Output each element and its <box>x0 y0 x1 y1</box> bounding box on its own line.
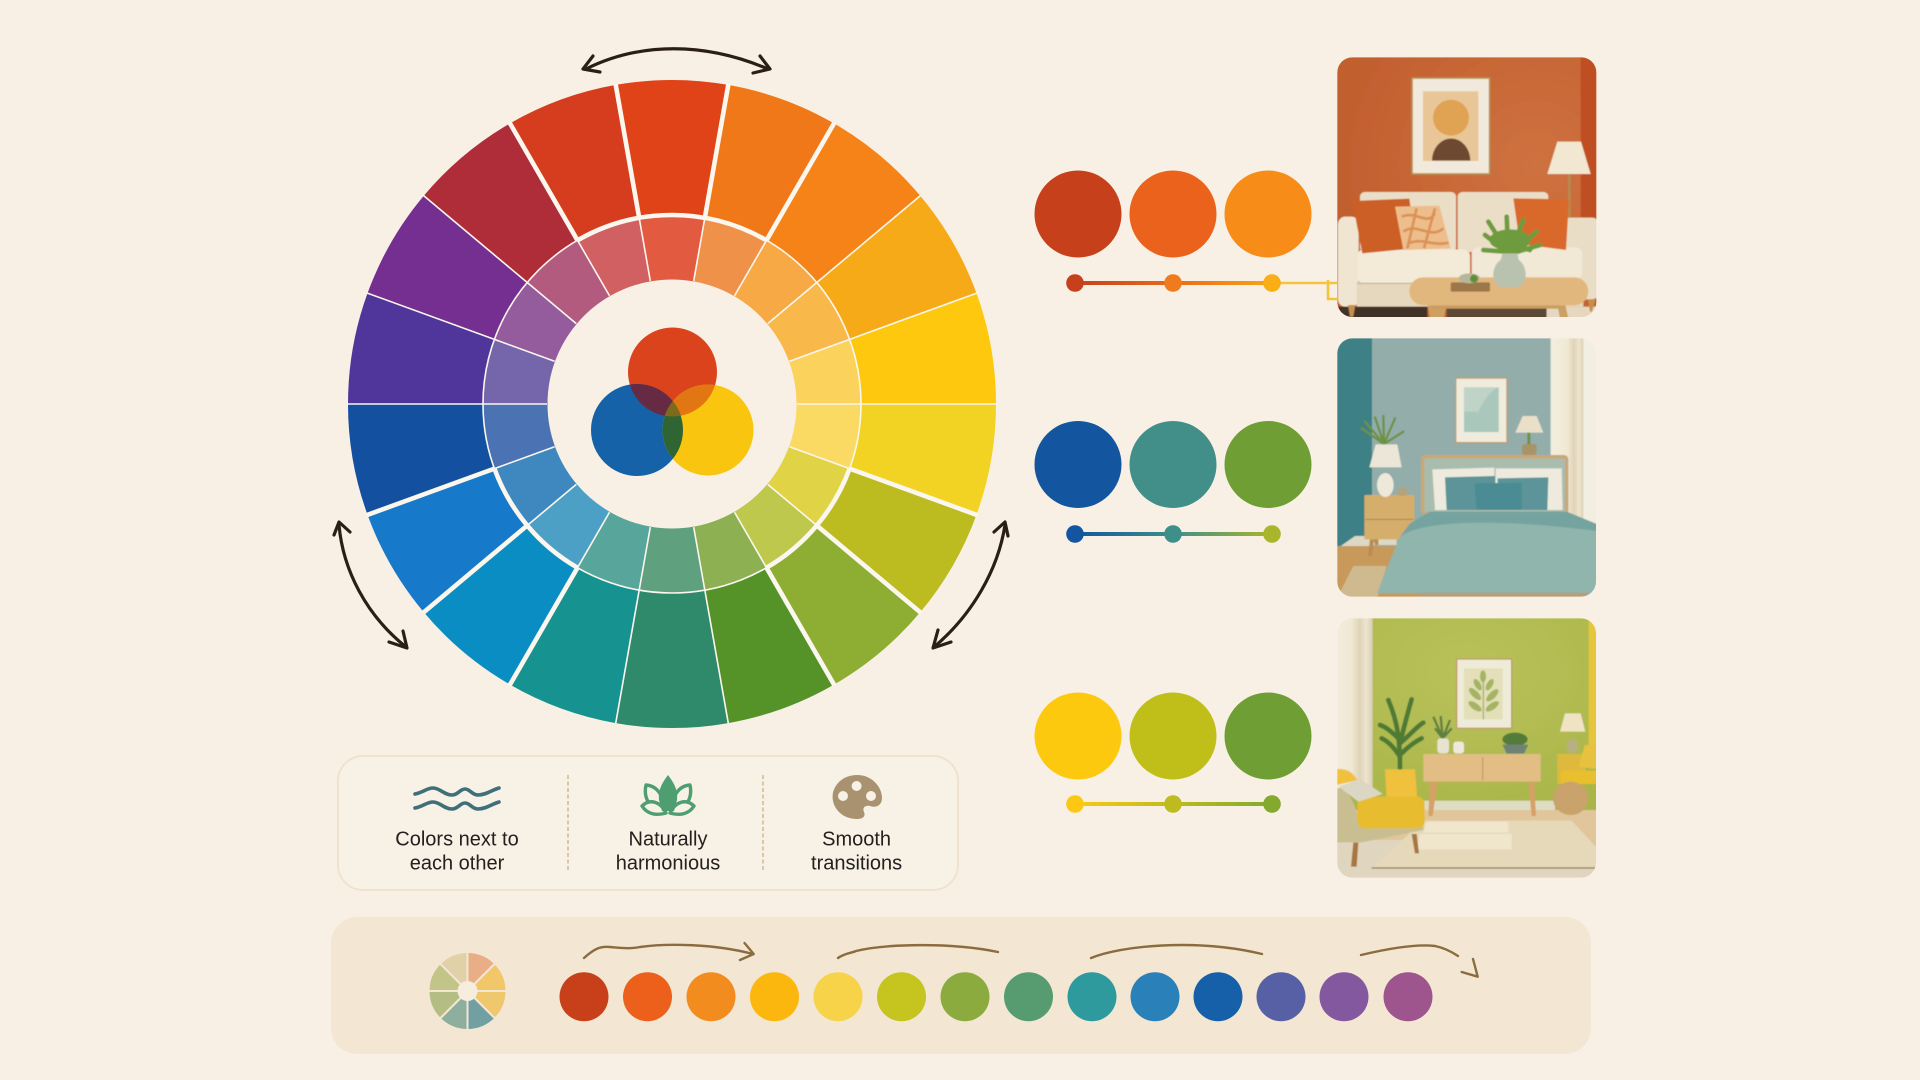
pillows <box>1432 468 1563 510</box>
label: Colors next to <box>395 828 519 850</box>
bottom color sequence band <box>331 917 1591 1054</box>
item: smooth transitions <box>811 775 902 874</box>
item: naturally harmonious <box>616 775 720 874</box>
right lamp and yellow chair <box>1552 712 1596 816</box>
item: colors next to each other <box>395 788 519 874</box>
outer ring of saturated hues <box>343 80 1001 728</box>
palette row 1: warm swatches <box>1034 170 1337 299</box>
label: harmonious <box>616 852 720 874</box>
label: Naturally <box>629 828 707 850</box>
color dot sequence <box>560 972 1432 1021</box>
connector timeline row 3 <box>1066 795 1281 813</box>
coffee table <box>1409 273 1588 318</box>
palette row 2: cool swatches <box>1034 421 1312 543</box>
floor <box>1338 299 1596 317</box>
connector timeline row 2 <box>1066 525 1281 543</box>
label: Smooth <box>822 828 891 850</box>
nightstand <box>1364 495 1414 556</box>
icon: palette <box>833 775 882 819</box>
floor shadow <box>1337 840 1595 878</box>
label: transitions <box>811 852 902 874</box>
framed art <box>1457 659 1512 728</box>
color wheel <box>343 80 1001 728</box>
curtain <box>1337 618 1374 789</box>
framed art <box>1412 78 1490 174</box>
floor lamp <box>1547 142 1591 217</box>
palette row 3: yellow-green swatches <box>1034 692 1312 813</box>
primary color overlap circles <box>591 328 754 485</box>
potted plant <box>1380 699 1423 798</box>
icon: mini color wheel <box>428 952 506 1030</box>
connector timeline row 1 <box>1066 274 1337 299</box>
photo: yellow-green living room <box>1330 612 1603 885</box>
sofa <box>1338 192 1599 307</box>
photo: orange living room <box>1330 50 1604 323</box>
armchair <box>1330 769 1425 867</box>
pillows <box>1352 198 1569 253</box>
icon: waves <box>415 788 499 809</box>
arrow: lower-right double-headed <box>933 522 1008 648</box>
framed art <box>1456 378 1507 443</box>
bed duvet <box>1377 512 1603 599</box>
icon: lotus <box>642 775 694 814</box>
inner ring of tints <box>480 215 864 593</box>
legend panel <box>338 756 958 890</box>
bedside lamp left with plant <box>1362 416 1407 497</box>
console table <box>1423 754 1541 816</box>
bedside lamp right <box>1515 416 1543 455</box>
arrow: top double-headed <box>583 49 770 73</box>
vase with plant <box>1483 217 1540 287</box>
label: each other <box>410 852 505 874</box>
hand-drawn flow arrows <box>584 943 1478 977</box>
curtain and window <box>1550 338 1596 524</box>
rug <box>1372 821 1603 868</box>
photo: teal bedroom <box>1337 338 1596 597</box>
tabletop decor <box>1433 716 1528 754</box>
arrow: lower-left double-headed <box>334 522 407 648</box>
headboard <box>1423 457 1567 513</box>
